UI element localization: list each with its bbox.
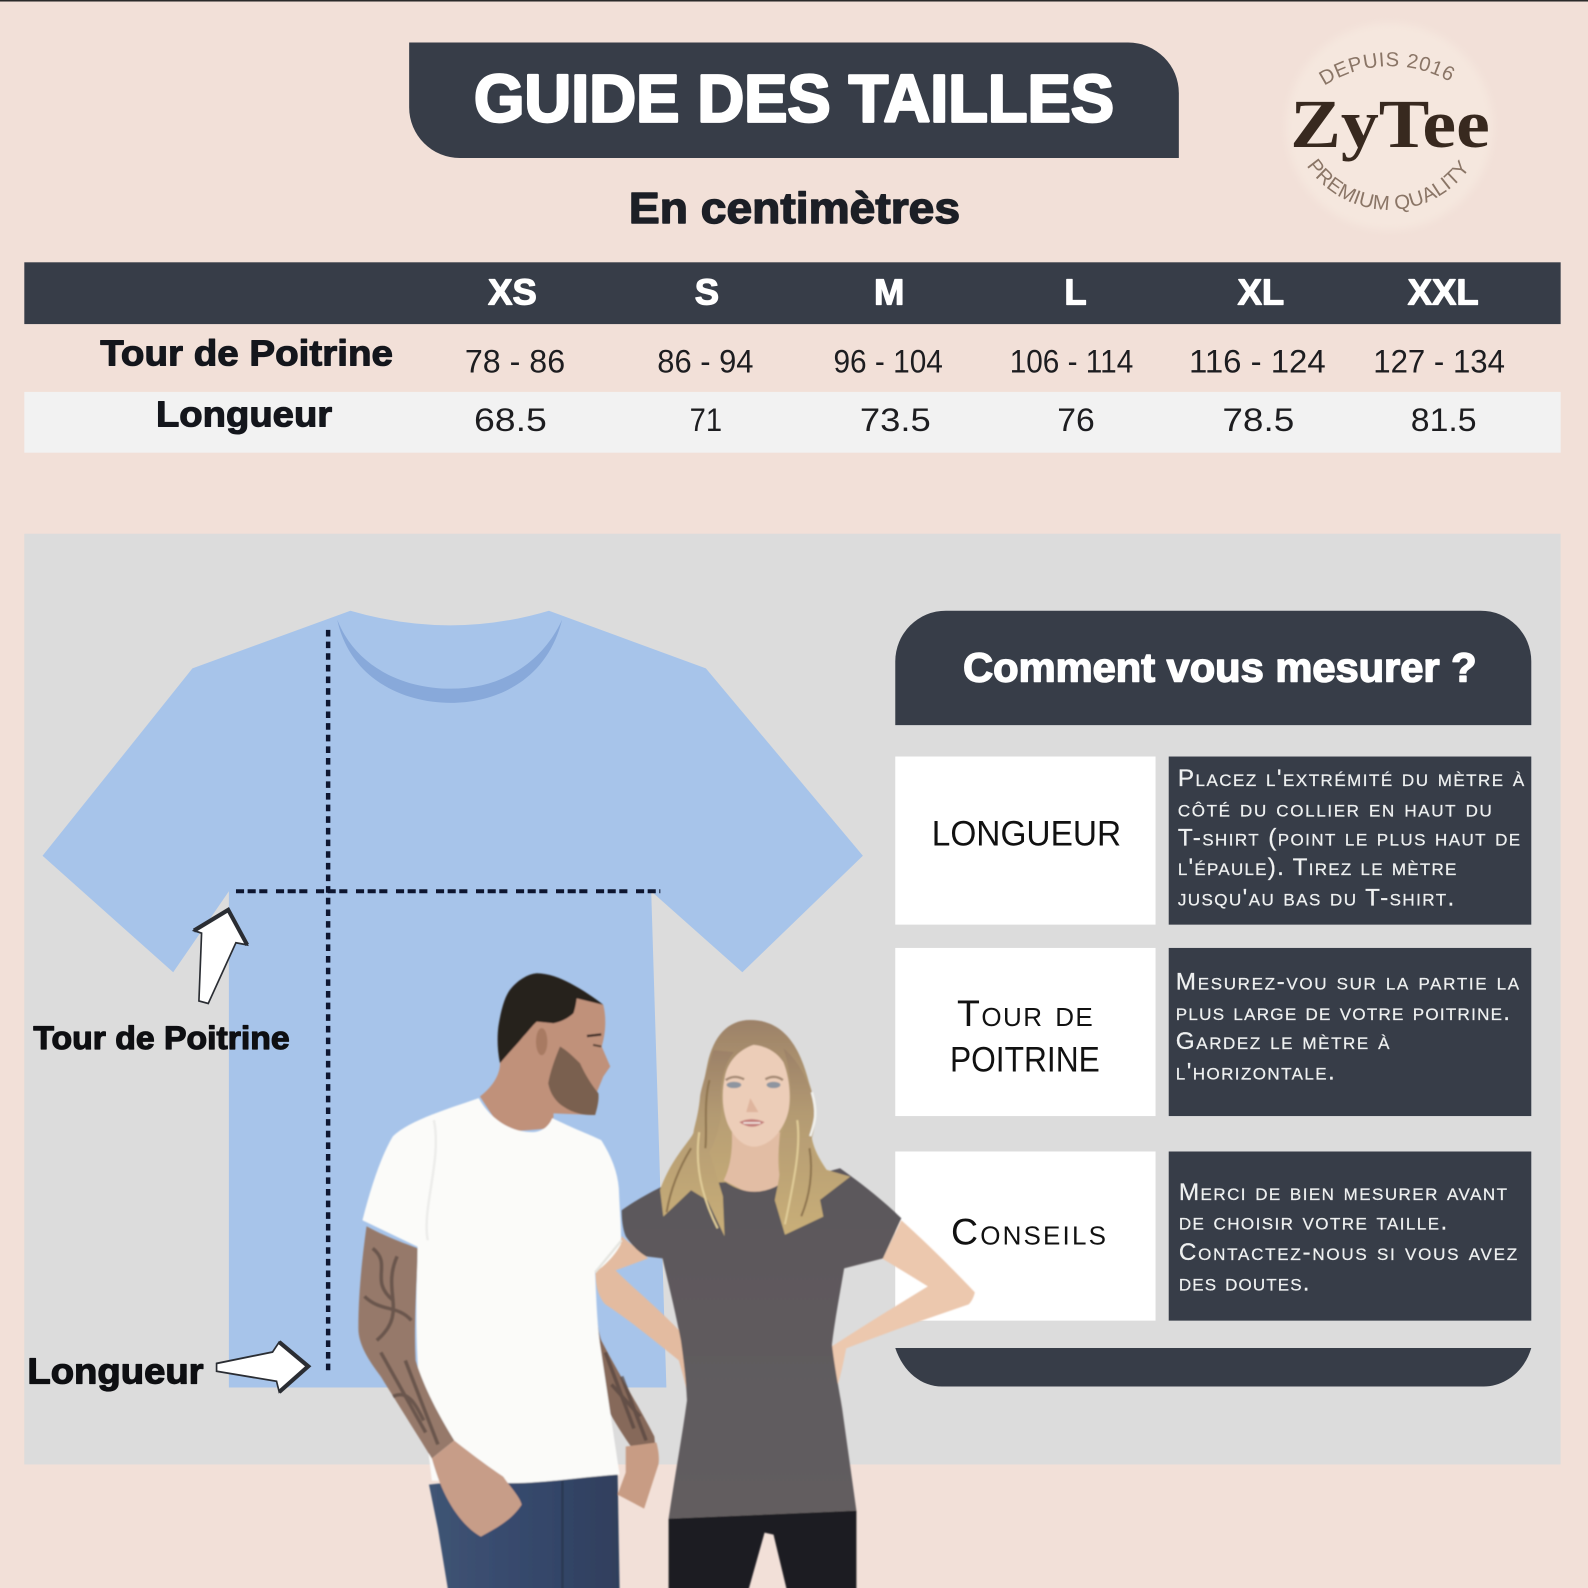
logo: ZyTee [1290,52,1490,212]
row: tour de poitrine [100,333,1505,380]
panel: how to measure [895,611,1531,1386]
table header row: XL [1238,271,1284,312]
row: tour de poitrine: l'horizontale. [1176,1059,1335,1086]
row: conseils [895,1152,1531,1321]
row: longueur: 78.5 [1222,402,1294,438]
logo: ZyTee: DEPUIS 2016 [1318,52,1454,85]
row: longueur: 81.5 [1411,402,1477,438]
table header row: S [695,271,719,312]
table header row: M [874,271,904,312]
subtitle: En centimètres [629,185,960,233]
label: longueur: Longueur [27,1350,204,1391]
row: tour de poitrine: 78 - 86 [465,344,565,380]
table header row [24,262,1561,324]
row: conseils: Conseils [951,1211,1106,1253]
row: tour de poitrine: Gardez le mètre à [1176,1028,1390,1055]
t-shirt diagram [43,611,863,1387]
row: longueur: côté du collier en haut du [1178,795,1492,822]
row: longueur: jusqu'au bas du T-shirt. [1178,884,1454,911]
row: conseils: Merci de bien mesurer avant [1179,1179,1507,1206]
title banner [409,43,1179,158]
row: conseils: des doutes. [1179,1269,1309,1296]
row: tour de poitrine: Tour de [957,992,1093,1034]
row: longueur: 76 [1057,402,1095,438]
heading: comment vous mesurer: Comment vous mesurer ? [963,645,1477,691]
panel: measurement area [24,534,1561,1464]
row: tour de poitrine: 86 - 94 [657,344,753,380]
dotted line: chest [236,889,660,893]
row: longueur: l'épaule). Tirez le mètre [1178,854,1456,881]
heading: comment vous mesurer [895,611,1531,725]
row: tour de poitrine: Mesurez-vou sur la partie la [1176,968,1520,995]
row: tour de poitrine: 96 - 104 [833,344,943,380]
title banner: GUIDE DES TAILLES [474,62,1114,137]
row: conseils: Contactez-nous si vous avez [1179,1239,1517,1266]
arrow: length pointer [217,1342,308,1392]
table header row: XS [488,271,537,312]
logo: ZyTee: PREMIUM QUALITY [1308,158,1466,212]
dotted line: length [326,630,330,1375]
photo: two models [358,973,975,1588]
man in white t-shirt [358,973,659,1588]
row: tour de poitrine: 106 - 114 [1010,344,1133,380]
row: longueur: 71 [690,402,722,438]
row: tour de poitrine: POITRINE [950,1039,1100,1079]
arrow: chest pointer [194,910,247,1003]
row: longueur: 73.5 [860,402,931,438]
row: longueur: 68.5 [474,402,547,438]
row: tour de poitrine: Tour de Poitrine [100,333,393,374]
row: longueur: Placez l'extrémité du mètre à [1178,765,1525,792]
row: longueur: T-shirt (point le plus haut de [1178,825,1520,852]
row: longueur [895,757,1531,925]
row: longueur [24,392,1561,453]
table header row: XXL [1408,271,1479,312]
footer bar [895,1348,1531,1386]
row: tour de poitrine: plus large de votre poitrine. [1176,999,1510,1026]
row: conseils: de choisir votre taille. [1179,1208,1447,1235]
row: tour de poitrine: 127 - 134 [1373,344,1505,380]
label: tour de poitrine: Tour de Poitrine [33,1020,290,1056]
table header row: L [1064,271,1087,312]
row: tour de poitrine [895,948,1531,1116]
row: longueur: Longueur [156,393,332,434]
woman in grey t-shirt [595,1020,975,1588]
icon: collar [337,620,562,703]
size table [24,262,1561,453]
row: longueur: LONGUEUR [932,814,1121,854]
logo: ZyTee: ZyTee [1290,86,1490,162]
row: tour de poitrine: 116 - 124 [1189,344,1326,380]
